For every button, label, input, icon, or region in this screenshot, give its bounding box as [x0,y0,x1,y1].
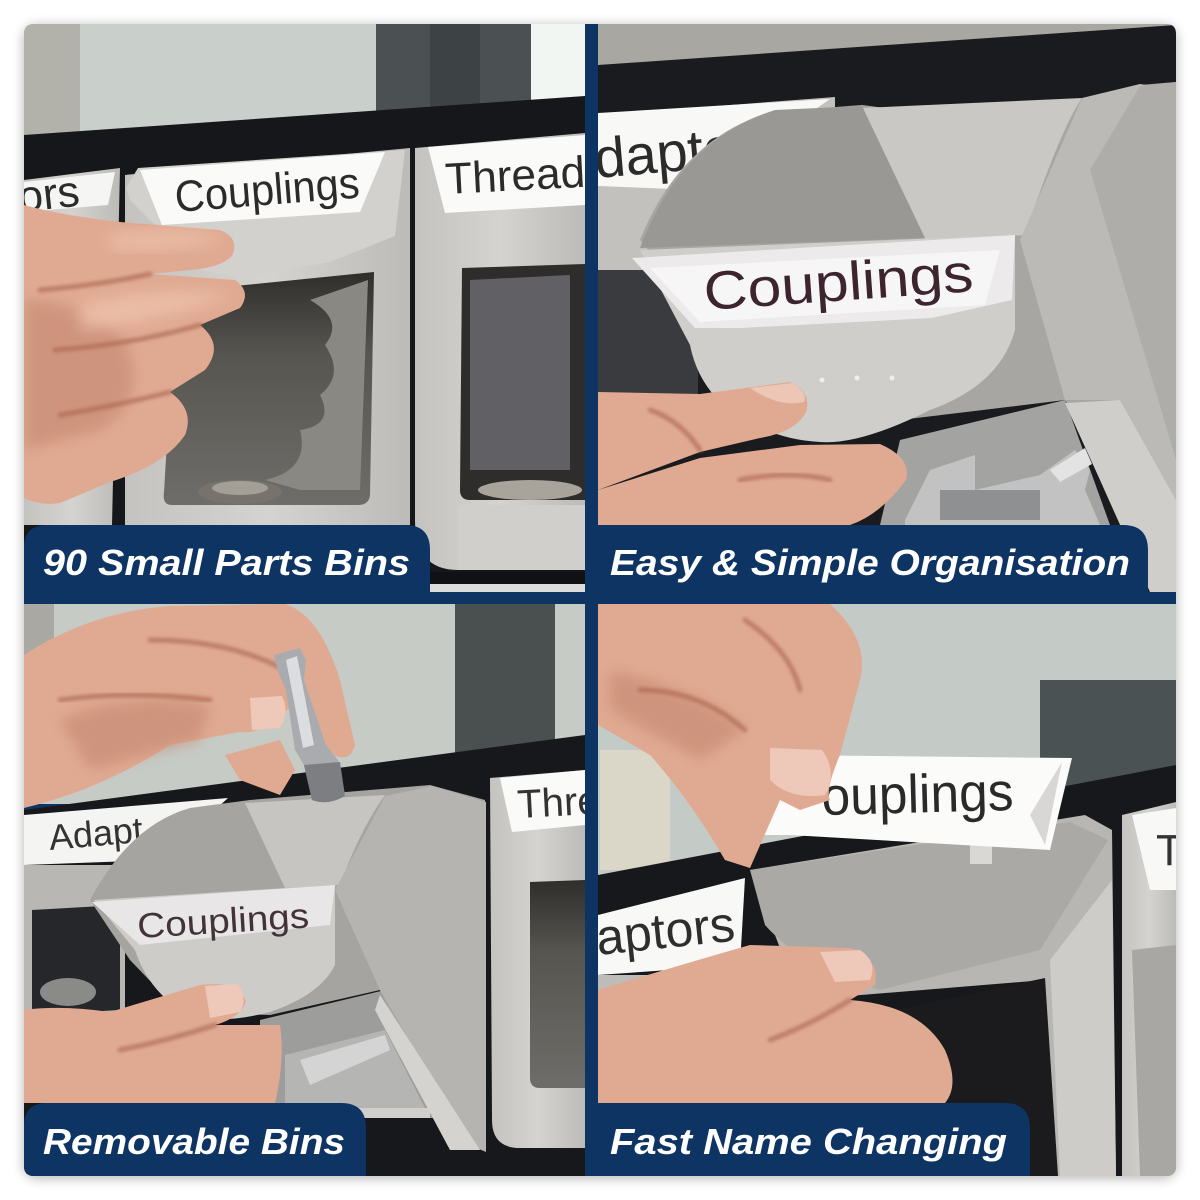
panel: 90 small parts bins [16,24,586,592]
pulled out bin [632,82,1176,592]
caption: removable bins [24,1103,366,1176]
thread bin [490,770,585,1148]
caption: fast name changing: Fast Name Changing [610,1121,1007,1162]
far right bin: T [1156,826,1183,875]
divider: horizontal [24,592,1176,604]
pulled out bin [90,785,486,1152]
lower hand [24,984,282,1103]
metal fitting [274,648,345,802]
bin label [140,152,385,225]
caption: easy and simple organisation: Easy & Simple Organisation [610,542,1130,583]
left neighbouring bin [16,167,120,525]
couplings bin: Couplings [173,159,361,222]
black shelf [24,735,585,1176]
black shelf [598,765,1176,1176]
adaptors bin: aptors [593,896,737,966]
neighbouring adapter bin: dapte [592,115,737,190]
caption: removable bins: Removable Bins [43,1121,345,1162]
thread bin: Thread [444,148,586,204]
far right bin [1122,802,1176,1176]
panel: easy and simple organisation [592,24,1176,592]
neighbouring adapter bin [592,97,835,395]
adaptors bin [24,798,228,1012]
window with silver fittings [260,990,435,1118]
thread bin: Thre [516,779,601,827]
thread bin [415,133,586,570]
hand [24,205,245,504]
window with silver fittings [880,400,1110,525]
black shelf unit [24,96,585,592]
pulled out bin: Couplings [136,897,310,946]
photo background [598,24,1176,65]
photo background [24,604,585,804]
upper hand [598,604,862,868]
fingers [598,382,907,525]
bin window [164,272,374,505]
couplings bin [125,148,410,525]
open bin [750,815,1116,1176]
caption: 90 small parts bins [24,525,430,604]
panel: fast name changing [593,604,1183,1176]
black shelf [598,25,1176,592]
photo background [24,24,585,135]
caption: 90 small parts bins: 90 Small Parts Bins [43,542,410,583]
label slip: ouplings [821,762,1014,827]
left neighbouring bin: ors [16,167,82,222]
pulled out bin: Couplings [702,243,975,322]
holding hand [24,604,355,808]
label slip [755,755,1072,850]
divider: vertical [585,24,598,1176]
clear label cover [632,235,1015,328]
adaptors bin: Adapt [47,809,144,858]
caption: fast name changing [585,1103,1030,1176]
lower hand [598,945,952,1103]
adaptors bin [598,878,745,990]
bottom shelf strip [410,572,585,592]
caption: easy and simple organisation [585,525,1148,604]
panel: removable bins [24,604,601,1176]
photo background [598,604,1176,904]
